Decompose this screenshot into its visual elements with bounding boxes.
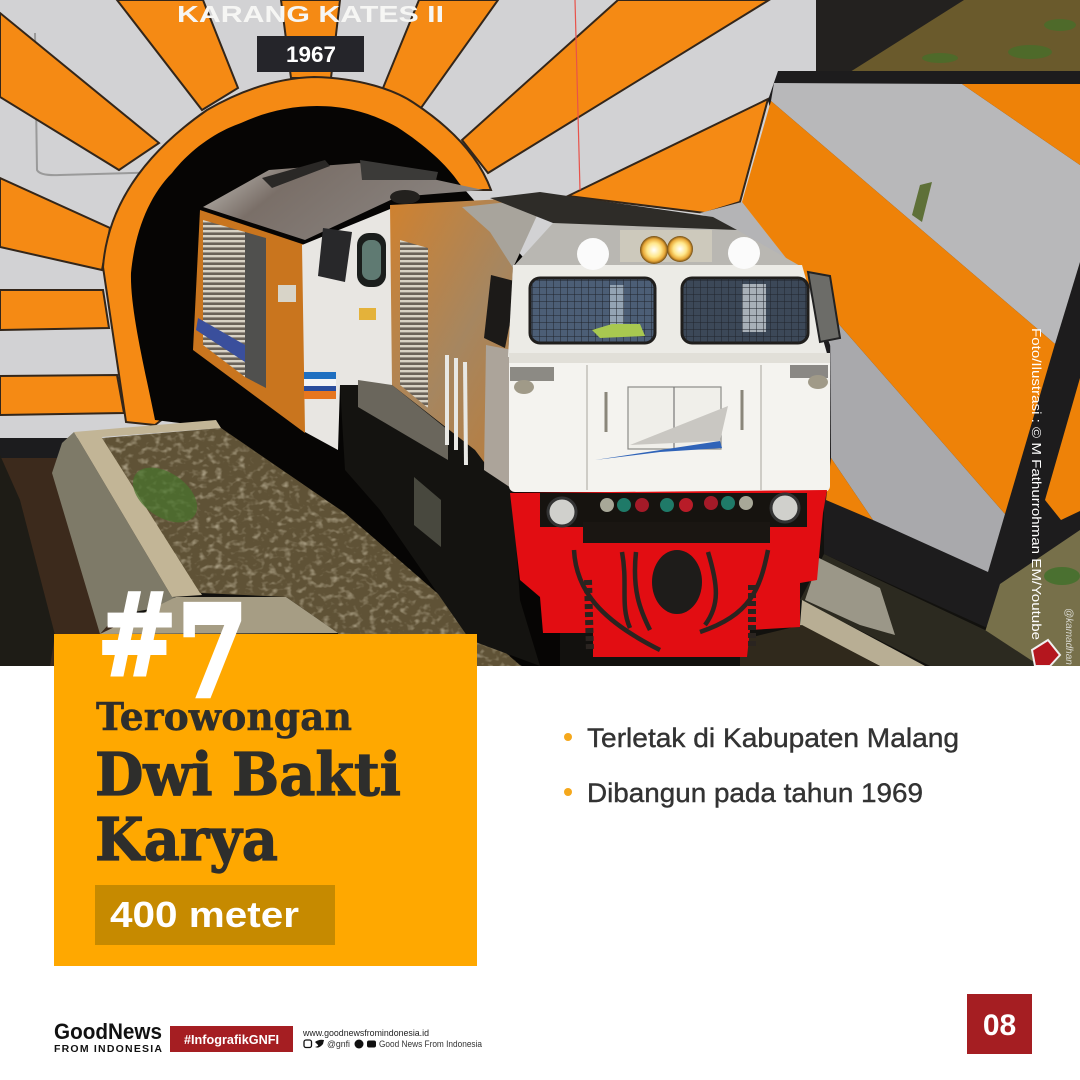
social handle: @gnfi bbox=[327, 1039, 350, 1049]
wall conduit bbox=[35, 33, 170, 175]
door seam lines bbox=[587, 365, 761, 490]
dark exhaust lump on the hood bbox=[390, 190, 420, 204]
left latch bbox=[514, 380, 534, 394]
lower grey section bbox=[830, 314, 1005, 572]
page number box bbox=[967, 994, 1032, 1054]
page number text: 08 bbox=[983, 1009, 1016, 1042]
right headlight bbox=[667, 236, 693, 262]
grey wall sections bbox=[771, 83, 1080, 572]
bullet one bbox=[564, 733, 572, 741]
hi-vis vest in the window bbox=[592, 324, 645, 338]
side window bbox=[318, 228, 352, 282]
stream bed bbox=[800, 554, 1040, 666]
fuel tank panel bbox=[414, 477, 441, 547]
front of the locomotive bbox=[490, 192, 840, 657]
red wire bbox=[575, 0, 580, 190]
coupler bbox=[652, 550, 702, 614]
ground beside the trough bbox=[0, 458, 125, 666]
fact list bbox=[564, 723, 959, 808]
green hillside patches bbox=[922, 19, 1076, 63]
concrete rim bbox=[74, 420, 221, 597]
roof vents bbox=[360, 160, 438, 180]
orange stripe bbox=[304, 391, 336, 399]
watermark figure bbox=[1032, 640, 1060, 666]
white cab bbox=[508, 265, 828, 357]
grey upper cab bbox=[513, 223, 802, 267]
fact two: Dibangun pada tahun 1969 bbox=[587, 778, 923, 808]
green marker bbox=[721, 496, 735, 510]
green marker bbox=[617, 498, 631, 512]
white lower background bbox=[0, 666, 1080, 1080]
white stripe bbox=[304, 379, 336, 386]
silver cab side panel bbox=[484, 345, 514, 490]
concrete outer side bbox=[52, 432, 200, 634]
grey wedge beside the cab bbox=[700, 202, 832, 350]
right vent bbox=[790, 365, 828, 378]
blue and red livery stripes bbox=[196, 318, 245, 362]
rocky corner bbox=[985, 530, 1080, 666]
rear stripes bbox=[304, 372, 336, 399]
gravel speckle bbox=[102, 428, 522, 666]
red pilot bbox=[510, 490, 827, 657]
left window mesh bbox=[530, 278, 655, 343]
hashtag text: #InfografikGNFI bbox=[184, 1033, 279, 1047]
dark gravel right of the train bbox=[740, 625, 880, 666]
plate year: 1967 bbox=[286, 42, 336, 67]
side mirror cage bbox=[808, 272, 840, 342]
green moss on the rocks bbox=[1044, 567, 1080, 585]
icon: twitter bbox=[315, 1040, 324, 1048]
social name: Good News From Indonesia bbox=[379, 1039, 482, 1049]
right grab handle bbox=[740, 390, 744, 430]
website: www.goodnewsfromindonesia.id bbox=[302, 1028, 429, 1039]
nose hatch bbox=[628, 387, 721, 449]
rank number: 7 bbox=[178, 580, 247, 725]
concrete curb bbox=[800, 600, 925, 666]
red marker bbox=[679, 498, 693, 512]
gravel bed bbox=[102, 428, 521, 666]
panel background bbox=[54, 634, 477, 966]
hood body bbox=[390, 197, 541, 470]
left marker dome bbox=[577, 238, 609, 270]
undercarriage bbox=[340, 385, 540, 666]
long hood of the locomotive bbox=[390, 190, 545, 490]
cab door window bbox=[357, 233, 386, 287]
left vent bbox=[510, 367, 554, 381]
rear hood of the locomotive bbox=[193, 160, 483, 450]
navy stripe bbox=[304, 386, 336, 391]
icon: instagram bbox=[304, 1040, 312, 1048]
tunnel arch bbox=[103, 77, 491, 425]
left lamp bbox=[548, 498, 576, 526]
walkway bbox=[358, 380, 448, 460]
yellow warning sign bbox=[359, 308, 376, 320]
roof bbox=[203, 163, 483, 240]
silver hood shoulder bbox=[462, 198, 545, 268]
pale curtain in the right window bbox=[742, 284, 766, 332]
painted tunnel wall bbox=[0, 0, 830, 440]
length text: 400 meter bbox=[110, 894, 299, 935]
side panel bbox=[193, 210, 305, 433]
roof vents bbox=[262, 160, 330, 188]
dark wall in the lower left bbox=[0, 455, 55, 666]
grey marker bbox=[739, 496, 753, 510]
gravel trough bbox=[52, 420, 522, 666]
fact one: Terletak di Kabupaten Malang bbox=[587, 723, 959, 753]
grey marker bbox=[600, 498, 614, 512]
black light bar bbox=[540, 493, 807, 527]
icon: facebook bbox=[354, 1040, 364, 1048]
dark wall base under the rays bbox=[0, 438, 130, 462]
louvres bbox=[203, 220, 245, 377]
hood louvres bbox=[400, 240, 428, 408]
nose bbox=[509, 357, 830, 492]
white hand rails bbox=[447, 355, 466, 465]
white cab end bbox=[302, 205, 400, 450]
retaining wall panel bbox=[768, 71, 1080, 627]
bullet two bbox=[564, 788, 572, 796]
concrete blocks bbox=[805, 558, 895, 635]
title line one: Dwi Bakti bbox=[95, 740, 401, 809]
pale reflection in the left window bbox=[610, 285, 624, 325]
right latch bbox=[808, 375, 828, 389]
tunnel opening bbox=[131, 106, 560, 666]
1967 plate bbox=[257, 36, 364, 72]
red marker bbox=[704, 496, 718, 510]
plate background bbox=[257, 36, 364, 72]
left grab handle bbox=[604, 392, 608, 432]
icon: youtube bbox=[367, 1040, 376, 1048]
right window bbox=[682, 278, 808, 343]
photo: train leaving the Dwi Bakti Karya tunnel bbox=[0, 0, 1080, 666]
dark photo base bbox=[0, 0, 1080, 666]
photo credit: Foto/Ilustrasi : © M Fathurrohman EM/Youtube bbox=[1029, 328, 1044, 640]
headlight housing bbox=[620, 230, 712, 262]
hood side window bbox=[484, 275, 518, 348]
photographer watermark: @kamadhan bbox=[1063, 608, 1074, 665]
grassy hillside bbox=[850, 0, 1080, 72]
subtitle: Terowongan bbox=[96, 695, 352, 740]
dark grey section bbox=[245, 232, 266, 388]
swoosh logo grey bbox=[630, 406, 728, 445]
nose shading top bbox=[509, 353, 830, 363]
right lamp bbox=[771, 494, 799, 522]
title panel bbox=[54, 568, 477, 966]
dark roof bbox=[490, 192, 737, 235]
black lower bar bbox=[583, 522, 770, 543]
length badge bbox=[95, 885, 335, 945]
logo tagline: FROM INDONESIA bbox=[54, 1043, 162, 1055]
upper grey section bbox=[771, 83, 1080, 344]
door window glass bbox=[362, 240, 381, 280]
moss on the gravel bbox=[123, 456, 207, 534]
title line two: Karya bbox=[95, 805, 278, 874]
page number bbox=[967, 994, 1032, 1054]
swoosh logo bbox=[595, 441, 722, 460]
left window bbox=[530, 278, 655, 343]
footer bbox=[54, 1019, 482, 1055]
right marker dome bbox=[728, 237, 760, 269]
hashtag badge bbox=[170, 1026, 293, 1052]
tunnel sign: Karang Kates II: KARANG KATES II bbox=[177, 1, 444, 27]
logo wordmark: GoodNews bbox=[54, 1019, 162, 1044]
rank hash: # bbox=[97, 568, 177, 702]
hatch centre line bbox=[673, 387, 675, 449]
left headlight bbox=[640, 236, 668, 264]
side number plate bbox=[278, 285, 296, 302]
marker lights bbox=[600, 496, 753, 512]
blue stripe bbox=[304, 372, 336, 379]
tiny weed on the wall bbox=[912, 182, 932, 222]
concrete front rim bbox=[100, 597, 338, 634]
hoses and chains bbox=[574, 550, 768, 652]
green marker bbox=[660, 498, 674, 512]
orange wall stripes bbox=[742, 84, 1080, 520]
orange sunburst rays bbox=[0, 0, 769, 415]
right window mesh bbox=[682, 278, 808, 343]
red marker bbox=[635, 498, 649, 512]
dark building at the top right bbox=[816, 0, 966, 72]
